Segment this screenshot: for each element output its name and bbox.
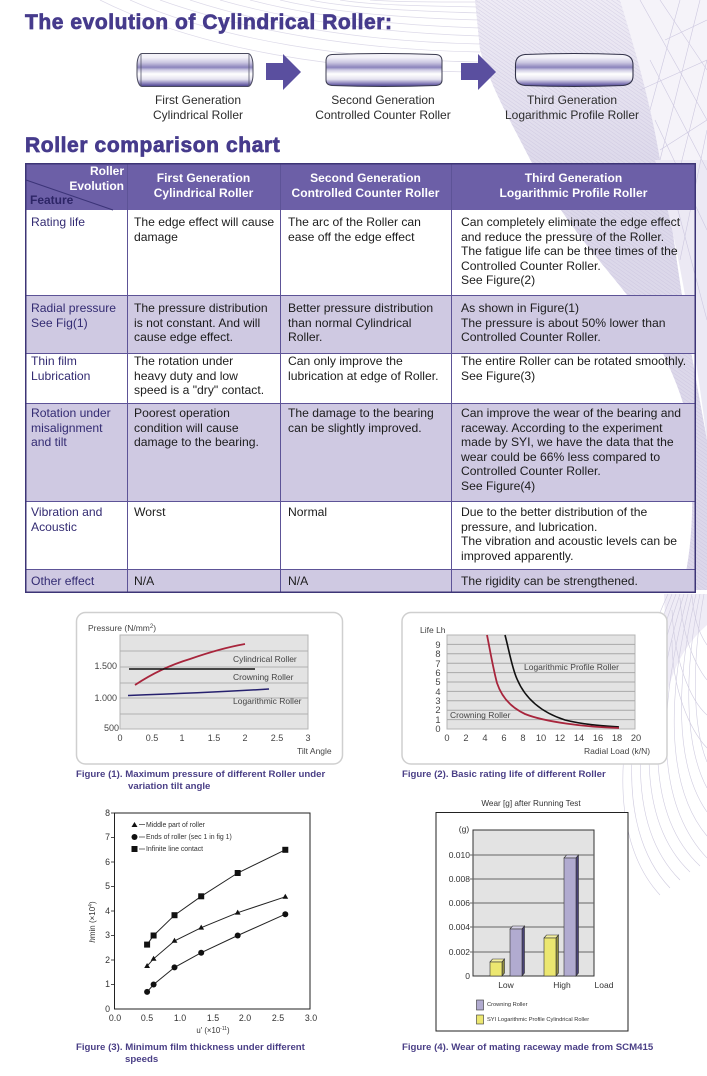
caption: figure 3: speeds (125, 1054, 158, 1065)
table header row (25, 163, 696, 210)
chart: figure 3 film thickness: 3 (105, 930, 110, 940)
label: third generation (505, 93, 639, 122)
row: vibration and acoustic: improved apparently. (461, 549, 573, 563)
chart: figure 4 wear bars: Load (595, 980, 614, 990)
chart: figure 4 wear bars: 0.004 (449, 922, 470, 932)
row: rating life (31, 215, 680, 287)
row: rotation under misalignment and tilt: wear could be 66% less compared to (461, 450, 660, 464)
row: rotation under misalignment and tilt: misalignment (31, 421, 103, 435)
chart: figure 4 wear bars: 0.006 (449, 898, 470, 908)
row: thin film lubrication: Thin film (31, 354, 77, 368)
chart: figure 4 wear bars: Wear [g] after Running Test (481, 799, 581, 808)
chart area: figure 2: Radial Load (k/N) (584, 746, 650, 756)
chart area: figure 1: 1 (179, 733, 185, 743)
chart: figure 4 wear bars: 0.010 (449, 850, 470, 860)
chart: figure 3 film thickness: u' (×10 (196, 1026, 220, 1035)
chart area: figure 1: Tilt Angle (297, 746, 332, 756)
title: The evolution of Cylindrical Roller: The evolution of Cylindrical Roller: (25, 11, 392, 34)
chart area: figure 2: 12 (555, 733, 565, 743)
label: second generation (315, 93, 451, 122)
chart: figure 3 film thickness: 0.0 (109, 1013, 121, 1023)
row: vibration and acoustic: pressure, and lubrication. (461, 520, 597, 534)
chart area: figure 1: 0.5 (146, 733, 158, 743)
chart: figure 3 film thickness: 4 (88, 904, 94, 907)
row: other effect (25, 569, 696, 593)
chart area: figure 2: 14 (574, 733, 584, 743)
label: first generation: Cylindrical Roller (153, 108, 243, 122)
chart: figure 3 film thickness: ) (88, 901, 97, 904)
row: radial pressure: Controlled Counter Roller. (461, 330, 601, 344)
chart: figure 4 wear bars: 0.002 (449, 947, 470, 957)
caption: figure 3 (76, 1042, 305, 1065)
row: other effect: N/A (134, 574, 154, 588)
row: rotation under misalignment and tilt: made by SYI, we have the data that the (461, 435, 674, 449)
chart: figure 3 film thickness: Ends of roller (sec 1 in fig 1) (146, 834, 232, 841)
chart area: figure 1: Logarithmic Roller (233, 696, 302, 706)
chart area: figure 2: 0 (444, 733, 450, 743)
row: rating life: ease off the edge effect (288, 230, 414, 244)
row: thin film lubrication: See Figure(3) (461, 369, 535, 383)
icon: third generation roller (516, 54, 633, 86)
chart area: figure 1: Crowning Roller (233, 672, 294, 682)
chart area: figure 2: 18 (612, 733, 622, 743)
row: thin film lubrication: The entire Roller can be rotated smoothly. (461, 354, 686, 368)
chart area: figure 1: 1.5 (208, 733, 220, 743)
chart area: figure 2: 6 (435, 668, 441, 678)
table header row: Second Generation (310, 171, 421, 185)
chart: figure 4 wear bars: (g) (459, 824, 469, 834)
row: radial pressure: As shown in Figure(1) (461, 301, 579, 315)
chart area: figure 1: Pressure (N/mm (88, 623, 150, 633)
row: rating life: damage (134, 230, 178, 244)
chart area: figure 1: 1.500 (94, 661, 117, 671)
chart area: figure 1: 1.000 (94, 693, 117, 703)
chart: figure 3 film thickness: hmin (×10 (88, 907, 97, 943)
caption: figure 3: Figure (3). Minimum film thickness under different (76, 1042, 305, 1053)
chart area: figure 2: 0 (435, 724, 441, 734)
row: rating life: The fatigue life can be three times of the (461, 244, 678, 258)
row: radial pressure: cause edge effect. (134, 330, 233, 344)
chart area: figure 1: Cylindrical Roller (233, 654, 297, 664)
chart area: figure 2: 16 (593, 733, 603, 743)
row: rotation under misalignment and tilt: Can improve the wear of the bearing and (461, 406, 681, 420)
row: vibration and acoustic: Vibration and (31, 505, 102, 519)
label: first generation (153, 93, 243, 122)
row: rotation under misalignment and tilt: Rotation under (31, 406, 111, 420)
table header row: First Generation (157, 171, 250, 185)
row: thin film lubrication: The rotation under (134, 354, 233, 368)
row: thin film lubrication: speed is a "dry" contact. (134, 383, 264, 397)
row: vibration and acoustic: Normal (288, 505, 327, 519)
chart area: figure 2: Crowning Roller (450, 710, 511, 720)
chart area: figure 1: 2 (150, 624, 154, 630)
row: other effect: The rigidity can be strengthened. (461, 574, 638, 588)
chart area: figure 2 (420, 625, 650, 756)
chart area: figure 1: 500 (104, 723, 119, 733)
chart: figure 3 film thickness: 4 (105, 906, 110, 916)
row: radial pressure: Radial pressure (31, 301, 116, 315)
chart area: figure 2: 20 (631, 733, 641, 743)
chart area: figure 2: 7 (435, 659, 441, 669)
caption: figure 1: variation tilt angle (128, 781, 210, 792)
row: thin film lubrication: lubrication at edge of Roller. (288, 369, 439, 383)
row: other effect: N/A (288, 574, 308, 588)
label: first generation: First Generation (155, 93, 241, 107)
row: radial pressure: See Fig(1) (31, 316, 88, 330)
row: rating life: The edge effect will cause (134, 215, 274, 229)
chart area: figure 1: 3 (305, 733, 311, 743)
row: radial pressure: The pressure distribution (134, 301, 268, 315)
table header row: Controlled Counter Roller (292, 186, 439, 200)
chart area: figure 2: 8 (520, 733, 526, 743)
chart: figure 4 wear bars: 0.008 (449, 874, 470, 884)
chart: figure 4 wear bars: SYI Logarithmic Profile Cylindrical Roller (487, 1017, 589, 1023)
row: radial pressure: Better pressure distribution (288, 301, 433, 315)
caption: figure 1: Figure (1). Maximum pressure of different Roller under (76, 769, 325, 780)
table header row: Cylindrical Roller (154, 186, 253, 200)
row: vibration and acoustic (31, 505, 677, 563)
heading: Roller comparison chart: Roller comparison chart (25, 134, 280, 157)
icon: first generation roller (137, 54, 253, 86)
chart area: figure 2: 9 (435, 640, 441, 650)
label: second generation: Second Generation (331, 93, 435, 107)
row: rotation under misalignment and tilt: Poorest operation (134, 406, 230, 420)
row: rotation under misalignment and tilt: The damage to the bearing (288, 406, 434, 420)
caption: figure 1 (76, 769, 326, 792)
chart: figure 3 film thickness: 1.0 (174, 1013, 186, 1023)
row: rotation under misalignment and tilt: and tilt (31, 435, 67, 449)
chart area: figure 2: 5 (435, 677, 441, 687)
chart area: figure 1: 2 (242, 733, 248, 743)
chart area: figure 2: 4 (482, 733, 488, 743)
chart: figure 3 film thickness: 8 (105, 808, 110, 818)
row: rotation under misalignment and tilt (25, 403, 696, 501)
row: rating life: Rating life (31, 215, 85, 229)
caption: figure 4: Figure (4). Wear of mating raceway made from SCM415 (402, 1042, 653, 1053)
row: rating life: The arc of the Roller can (288, 215, 421, 229)
row: radial pressure: than normal Cylindrical (288, 316, 411, 330)
table header row: Feature (30, 193, 73, 207)
caption: figure 2: Figure (2). Basic rating life of different Roller (402, 769, 606, 780)
row: rotation under misalignment and tilt: See Figure(4) (461, 479, 535, 493)
chart: figure 3 film thickness: 2.5 (272, 1013, 284, 1023)
label: second generation: Controlled Counter Roller (315, 108, 451, 122)
row: radial pressure: The pressure is about 50% lower than (461, 316, 665, 330)
table header row: Logarithmic Profile Roller (500, 186, 648, 200)
row: vibration and acoustic: Due to the better distribution of the (461, 505, 647, 519)
chart: figure 3 film thickness: 3.0 (305, 1013, 317, 1023)
row: vibration and acoustic: Acoustic (31, 520, 77, 534)
row: vibration and acoustic: Worst (134, 505, 165, 519)
chart area: figure 1 (88, 623, 332, 756)
table header row: Evolution (69, 179, 124, 193)
chart: figure 3 film thickness: 1.5 (207, 1013, 219, 1023)
row: thin film lubrication (31, 354, 686, 397)
chart area: figure 2: 4 (435, 687, 441, 697)
chart: figure 3 film thickness: 2.0 (239, 1013, 251, 1023)
label: third generation: Third Generation (527, 93, 617, 107)
chart area: figure 2: Life Lh (420, 625, 446, 635)
chart: figure 3 film thickness: 7 (105, 832, 110, 842)
chart area: figure 2: 3 (435, 696, 441, 706)
row: radial pressure (25, 295, 696, 353)
chart: figure 3 film thickness: 5 (105, 881, 110, 891)
row: rating life: Controlled Counter Roller. (461, 259, 601, 273)
table header row: Roller (90, 164, 124, 178)
table header row: Third Generation (525, 171, 622, 185)
comparison table (25, 163, 696, 593)
chart: figure 3 film thickness: 6 (105, 857, 110, 867)
chart: figure 3 film thickness: 2 (105, 955, 110, 965)
chart: figure 3 film thickness: -11 (220, 1026, 227, 1032)
chart: figure 4 wear bars: Crowning Roller (487, 1002, 528, 1008)
chart area: figure 2: 2 (435, 705, 441, 715)
row: thin film lubrication: Lubrication (31, 369, 90, 383)
row: rotation under misalignment and tilt: damage to the bearing. (134, 435, 259, 449)
chart: figure 4 wear bars: 0 (465, 971, 470, 981)
chart: figure 3 film thickness: ) (227, 1026, 230, 1035)
chart area: figure 2: 10 (536, 733, 546, 743)
chart: figure 4 wear bars: Low (498, 980, 515, 990)
chart area: figure 2: 8 (435, 649, 441, 659)
row: other effect: Other effect (31, 574, 94, 588)
arrow: second to third (461, 54, 496, 90)
row: rating life: and reduce the pressure of the Roller. (461, 230, 664, 244)
row: rotation under misalignment and tilt: raceway. According to the experiment (461, 421, 663, 435)
row: rating life: See Figure(2) (461, 273, 535, 287)
chart area: figure 2: Logarithmic Profile Roller (524, 662, 619, 672)
chart: figure 3 film thickness: 1 (105, 979, 110, 989)
icon: second generation roller (326, 54, 442, 86)
chart area: figure 1: 2.5 (271, 733, 283, 743)
chart: figure 3 film thickness: 0 (105, 1004, 110, 1014)
roller evolution diagram (136, 53, 634, 90)
chart: figure 3 film thickness: Infinite line contact (146, 846, 203, 853)
row: rating life: Can completely eliminate the edge effect (461, 215, 680, 229)
chart: figure 3 film thickness: 0.5 (141, 1013, 153, 1023)
row: radial pressure: is not constant. And will (134, 316, 260, 330)
chart area: figure 1: 0 (117, 733, 123, 743)
chart area: figure 2: 1 (435, 715, 441, 725)
row: vibration and acoustic: The vibration and acoustic levels can be (461, 534, 677, 548)
row: rotation under misalignment and tilt: can be slightly improved. (288, 421, 422, 435)
chart: figure 3 film thickness: Middle part of roller (146, 822, 206, 829)
arrow: first to second (266, 54, 301, 90)
label: third generation: Logarithmic Profile Roller (505, 108, 639, 122)
chart area: figure 2: 2 (463, 733, 469, 743)
row: thin film lubrication: Can only improve the (288, 354, 403, 368)
row: rotation under misalignment and tilt: condition will cause (134, 421, 239, 435)
row: radial pressure: Roller. (288, 330, 322, 344)
chart area: figure 1: ) (153, 623, 156, 633)
chart: figure 4 wear bars: High (553, 980, 571, 990)
row: thin film lubrication: heavy duty and low (134, 369, 238, 383)
row: rotation under misalignment and tilt: Controlled Counter Roller. (461, 464, 601, 478)
chart area: figure 2: 6 (501, 733, 507, 743)
